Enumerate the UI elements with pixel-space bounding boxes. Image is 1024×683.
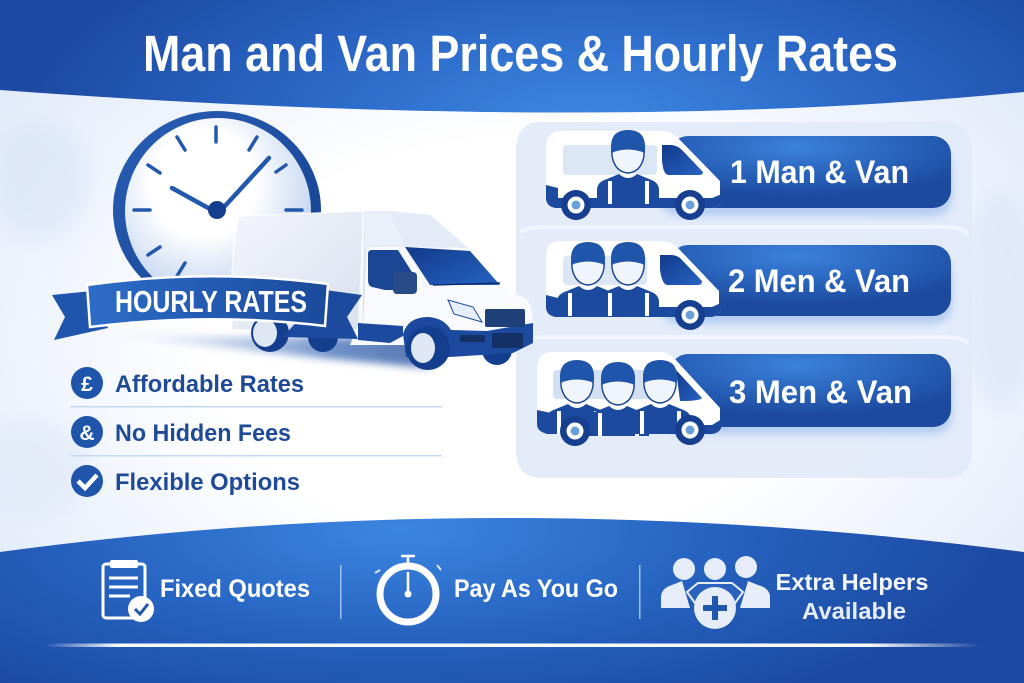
main van — [110, 211, 533, 370]
option panel backdrop — [516, 122, 972, 478]
footer: fixed quotes: Fixed Quotes — [160, 575, 310, 603]
footer: extra helpers — [661, 556, 928, 629]
icon: helpers with plus — [661, 556, 770, 629]
blue skirt — [358, 323, 403, 343]
hourly rates ribbon — [52, 276, 362, 340]
item: flexible options: Flexible Options — [115, 469, 300, 496]
far wheels — [308, 322, 512, 365]
icon: clipboard — [103, 560, 154, 622]
icon: check mark — [71, 465, 103, 497]
ribbon tails — [52, 291, 108, 340]
item: affordable rates — [71, 367, 304, 399]
title: Man and Van Prices & Hourly Rates — [143, 25, 898, 82]
van 1 — [546, 130, 722, 220]
icon: no hidden fees: & — [79, 422, 95, 445]
item: no hidden fees: No Hidden Fees — [115, 420, 291, 447]
van 3 — [537, 352, 722, 446]
ribbon text: HOURLY RATES — [115, 284, 307, 319]
option: 1 man and van — [546, 130, 952, 220]
label 2: 2 Men & Van — [728, 263, 910, 299]
icon: pound coin: £ — [81, 373, 93, 396]
item: no hidden fees — [71, 416, 291, 448]
icon: stopwatch — [375, 556, 441, 622]
cargo box — [231, 211, 363, 330]
footer: fixed quotes — [103, 560, 310, 622]
icon: no hidden fees — [71, 416, 103, 448]
feature list — [70, 367, 442, 497]
footer: pay as you go: Pay As You Go — [454, 575, 618, 603]
pill 3 — [670, 354, 951, 427]
top header band — [0, 0, 1024, 113]
option: 3 men and van — [537, 352, 952, 446]
headlight — [448, 300, 482, 322]
label 3: 3 Men & Van — [729, 374, 912, 410]
cab windows — [368, 250, 417, 290]
bottom footer band — [0, 518, 1024, 683]
ribbon banner — [87, 276, 328, 327]
item: flexible options — [71, 465, 300, 497]
footer: pay as you go — [375, 556, 618, 622]
label 1: 1 Man & Van — [730, 154, 909, 190]
cab body — [350, 211, 533, 345]
pill 2 — [670, 245, 951, 316]
helpers text: Extra Helpers — [776, 569, 928, 595]
van shadow — [110, 336, 430, 368]
panel: service options — [516, 122, 972, 478]
item: affordable rates: Affordable Rates — [115, 371, 304, 398]
pill 1 — [670, 136, 951, 208]
near wheels — [251, 314, 450, 370]
option: 2 men and van — [546, 241, 952, 330]
van 2 — [546, 241, 721, 330]
grille — [485, 309, 525, 327]
footer: extra helpers: Available — [802, 598, 906, 624]
icon: pound coin — [71, 367, 103, 399]
icon: clock — [113, 111, 321, 309]
